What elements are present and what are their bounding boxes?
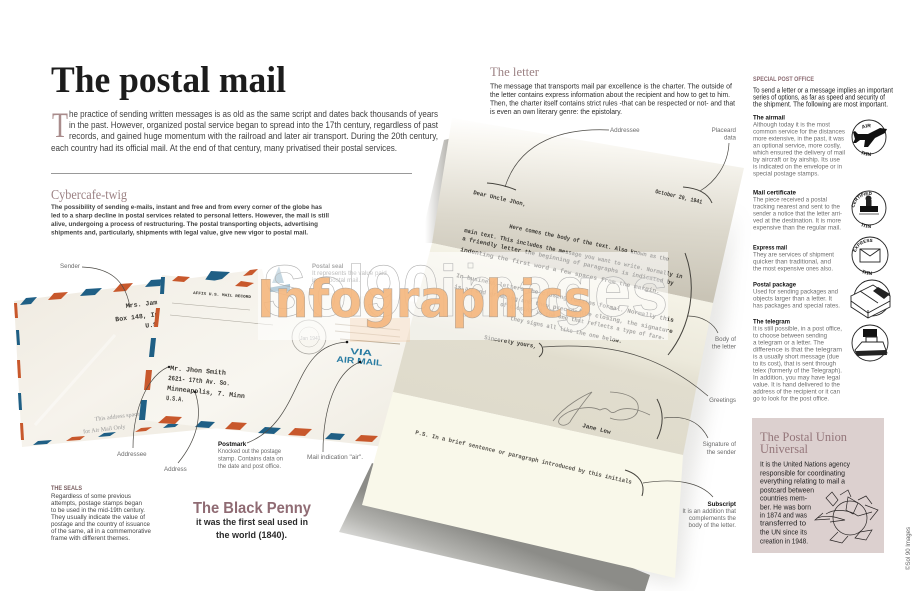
callout: The Black Penny: it was the first seal used in (196, 517, 308, 528)
item: mail certificate: Mail certificate (753, 190, 796, 196)
text block: Cybercafe-twig: led to a sharp decline in postal services related to personal letters. However, the mail is still (51, 212, 329, 220)
callout: Addressee on envelope (117, 366, 170, 458)
callout: Postal seal: Postal seal (312, 264, 344, 270)
intro paragraph: series of options, as far as speed and security of (753, 94, 885, 102)
callout: Greetings (539, 343, 736, 404)
text block: Cybercafe-twig: shipments and, particularly, shipments with legal value, give new vigor to postal mail. (51, 230, 308, 236)
body: the UN since its (760, 530, 807, 536)
item: telegram: is a usually short message (due (753, 354, 839, 360)
item: airmail: by aircraft or by airship. Its use (753, 156, 840, 164)
copyright: ©Sol 90 Images (905, 527, 912, 570)
air mail note: for Air Mail Only (83, 423, 126, 435)
body of letter: Here comes the body of the text. Also known as the (509, 223, 670, 263)
callout: Subscript: Subscript (707, 501, 736, 508)
callout: Placed data: Placeard (712, 127, 737, 134)
soft shadow behind letter (600, 210, 735, 585)
item: telegram: value. It is hand delivered to the (753, 382, 840, 388)
text block: The seals: of the same, all in a commemorative (51, 528, 151, 535)
text block: The letter: is even an own literary genre: the epistolary. (490, 107, 622, 116)
icon: express envelope stamp: TITN (862, 270, 872, 275)
VIA AIR MAIL mark (336, 345, 384, 368)
item: airmail: is indicated on the envelope or in (753, 164, 842, 170)
body: responsible for coordinating (760, 470, 845, 478)
item: airmail: The airmail (753, 114, 785, 122)
body: transferred to (760, 520, 806, 528)
item: mail certificate: expensive than the regular mail. (753, 224, 841, 232)
text block: The seals (51, 486, 151, 542)
panel: special post office: SPECIAL POST OFFICE (753, 76, 815, 83)
item: telegram: In addition, you may have legal (753, 374, 840, 382)
heading: Cybercafe-twig: Cybercafe-twig (51, 188, 127, 203)
text block: The seals: THE SEALS (51, 486, 82, 492)
callout: Sender: Sender (60, 263, 80, 270)
icon: airmail stamp: TITN (862, 150, 871, 156)
text block: Cybercafe-twig: The possibility of sending e-mails, instant and free and from every corner of the globe has (51, 204, 322, 211)
item: postal package (753, 282, 840, 310)
item: mail certificate (753, 190, 842, 232)
intro paragraph: To send a letter or a message implies an important (753, 88, 893, 94)
panel: special post office (752, 76, 893, 402)
item: express mail: quicker than traditional, and (753, 258, 831, 266)
VIA AIR MAIL mark: VIA (350, 346, 373, 358)
body of letter (454, 223, 684, 345)
heading: The letter: The letter (490, 64, 540, 79)
item: airmail: Although today it is the most (753, 122, 830, 128)
body of letter: In business letters the closing remains formal. Normally this (456, 272, 675, 324)
body of letter: of closing is the one that reflects a type of fare- (500, 301, 666, 342)
back address (113, 299, 160, 333)
item: airmail: more extensive, in the past, it was (753, 136, 844, 142)
text block: The letter (490, 82, 736, 116)
callout: Mail indication air: Mail indication "air". (307, 454, 363, 461)
text block: The seals: Regardless of some previous (51, 493, 132, 500)
callout: Postmark: Postmark (218, 441, 247, 448)
notice and lines: AFFIX U.S. MAIL RECORD (193, 292, 252, 300)
callout: Subscript (625, 470, 737, 529)
item: telegram: a telegram or a letter. The (753, 340, 824, 346)
callout: Subscript: complements the (689, 515, 737, 522)
callout: Address: Address (164, 466, 187, 473)
item: airmail: special postage stamps. (753, 170, 819, 178)
callout: Signature of the sender: Signature of (703, 441, 736, 448)
callout: Body of the letter: the letter (712, 344, 736, 350)
callout: Body of the letter (668, 253, 736, 355)
bottom stripes (33, 423, 180, 445)
item: express mail (753, 244, 834, 272)
intro text block (51, 105, 438, 153)
text block: The seals: postage and the country of issuance (51, 521, 150, 528)
text block: The letter: the letter contains express information about the recipient and how to get to him. (490, 90, 730, 99)
text block: The letter: The message that transports mail par excellence is the charter. The outside of (490, 82, 733, 90)
item: telegram: to choose between sending (753, 332, 827, 340)
icon: express envelope stamp (852, 236, 888, 275)
callout: Postmark: Knocked out the postage (218, 448, 282, 455)
item: mail certificate: ved at the destination. It is more (753, 218, 841, 224)
watermark band (258, 252, 668, 340)
closing: Sincerely yours, (484, 334, 537, 350)
body: countries mem- (760, 496, 808, 502)
text block: Cybercafe-twig: alive, undergoing a process of restructuring. The postal transporting objects, advertising (51, 221, 318, 228)
text block: The seals: attempts, postage stamps began (51, 500, 142, 507)
item: telegram: go to look for the post office. (753, 396, 829, 402)
callout: Postmark: stamp. Contains data on (218, 456, 284, 462)
watermark tint patch (350, 318, 410, 342)
intro text block: each country had its official mail. At the end of that century, many privatised their postal services. (51, 143, 397, 153)
item: telegram: difference is that the telegram (753, 346, 842, 354)
address: Minneapolis, 7. Minn (167, 385, 245, 401)
callout: Postal seal (312, 264, 387, 284)
intro text block: records, and gained huge momentum with the railroad and later air transport. During the 20th century, (69, 131, 438, 141)
icon: express envelope stamp: EXPRESS (853, 238, 872, 252)
item: telegram: address of the recipient or it can (753, 388, 840, 396)
callout: Address (164, 391, 198, 473)
watermark: Infographics: Infographics (257, 270, 592, 330)
body of letter: is an end greeting and they precede the closing, the signature (454, 283, 674, 335)
item: airmail: an optional service, more costly, (753, 142, 841, 150)
callout: Postmark (218, 341, 348, 470)
body of letter: they signs all like the one below. (510, 315, 623, 345)
letter: middle fold (393, 243, 713, 455)
item: express mail: Express mail (753, 244, 787, 252)
letter (362, 118, 744, 578)
item: postal package: objects larger than a letter. It (753, 296, 832, 302)
stripes on top (172, 276, 254, 287)
callout: Body of the letter: Body of (715, 336, 736, 343)
stripes on left (139, 277, 165, 420)
air mail note: This address space (95, 412, 140, 423)
stripes on bottom (158, 416, 378, 442)
item: postal package: Used for sending packages and (753, 288, 838, 296)
item: postal package: has packages and special rates. (753, 302, 840, 310)
heading: The Postal Union (760, 430, 848, 444)
intro paragraph: the shipment. The following are most important. (753, 102, 888, 108)
intro text block: he practice of sending written messages is as old as the same script and dates back thousands of years (69, 109, 438, 119)
body: everything relating to mail a (760, 478, 845, 486)
panel: Postal Union Universal (752, 418, 884, 553)
item: airmail: which ensured the delivery of mail (752, 150, 845, 156)
letter edge shadow strip (420, 138, 452, 243)
item: telegram: The telegram (753, 318, 790, 326)
address: U.S.A. (166, 395, 184, 405)
letter: bottom fold (362, 392, 683, 578)
envelope: back (14, 269, 300, 447)
body of letter: indenting the first word a few spaces from the margin. (460, 246, 661, 295)
body: It is the United Nations agency (760, 462, 850, 468)
callout: Greetings: Greetings (709, 397, 736, 404)
callout: Postal seal: in the postal mail. (312, 277, 360, 284)
text block: The seals: They usually indicate the value of (51, 514, 145, 521)
salutation: Dear Uncle Jhon, (473, 189, 527, 208)
icon: airmail stamp: AIR (862, 124, 871, 129)
callout: The Black Penny: The Black Penny (193, 500, 311, 517)
drop cap: T (52, 105, 68, 145)
postmark (292, 320, 400, 354)
icon: telegraph machine (852, 325, 888, 361)
envelope: front (139, 266, 445, 447)
icon: parcel (851, 280, 890, 318)
signature (553, 392, 650, 425)
item: telegram: to its cost), that is sent through (753, 360, 836, 368)
address: 2621- 17th Av. So. (168, 375, 230, 388)
callout: Addressee (487, 127, 640, 190)
callout: Addressee: Addressee (610, 127, 640, 134)
item: express mail: the most expensive ones also. (753, 266, 833, 272)
left stripes (14, 303, 24, 440)
item: mail certificate: tracking nearest and sent to the (753, 204, 840, 210)
callout: Subscript: body of the letter. (689, 522, 736, 529)
callout: Signature of the sender (657, 399, 736, 456)
callout: Postal seal: It represents the value paid (312, 270, 387, 277)
callout: Placed data: data (724, 134, 737, 142)
address: Mr. Jhon Smith (170, 365, 226, 378)
item: telegram: telex (formerly of the Telegraph). (753, 368, 842, 374)
body: ber. He was born (760, 504, 811, 512)
item: postal package: Postal package (753, 282, 796, 288)
callout: Placed data (683, 127, 737, 203)
body: in 1874 and was (760, 512, 807, 520)
text block: The seals: to be used in the mid-19th century. (51, 507, 145, 514)
text block: The seals: frame with different themes. (51, 535, 130, 542)
item: express mail: They are services of shipment (753, 252, 834, 258)
postmark: Jan 1941 (300, 336, 321, 342)
title: The postal mail (51, 60, 286, 101)
VIA AIR MAIL mark: AIR MAIL (336, 354, 383, 368)
callout: Subscript: It is an addition that (682, 508, 736, 515)
letter: top fold (432, 118, 744, 303)
item: mail certificate: sender a notice that the letter arri- (753, 210, 842, 218)
address (166, 365, 245, 405)
letter shadow panel (339, 463, 650, 591)
date: October 20, 1941 (655, 188, 703, 206)
callout: Signature of the sender: the sender (707, 449, 736, 456)
stamp (268, 266, 290, 292)
top stripes (20, 269, 258, 305)
back address: Box 148, In (115, 311, 159, 323)
icon: UPU monument (815, 490, 878, 543)
callout: The Black Penny: the world (1840). (216, 530, 287, 541)
text block: Cybercafe-twig (51, 204, 329, 236)
callout: Mail indication air (307, 361, 363, 461)
body of letter: a friendly letter the beginning of paragraphs is indicated by (462, 235, 675, 287)
back address: U.S (145, 321, 158, 330)
callout: Addressee on envelope: Addressee (117, 451, 147, 458)
sender name: Jane Lew (582, 422, 612, 436)
callout: Postmark: the date and post office. (218, 463, 281, 470)
body: postcard between (760, 488, 814, 494)
icon: certified stamp: CERTIFIED (852, 192, 872, 208)
callout: Sender (60, 263, 130, 307)
intro text block: in the past. However, organized postal service began to spread into the 17th century, regardless of past (69, 120, 438, 130)
item: airmail (752, 114, 845, 178)
watermark: Sol90images outline: Sol90images (262, 252, 668, 332)
icon: airmail stamp (852, 120, 887, 156)
postscript: P.S. In a brief sentence or paragraph introduced by this initials (415, 429, 633, 486)
air mail note (82, 412, 142, 435)
icon: certified stamp: TITN (862, 222, 871, 228)
body of letter: main text. This includes the message you want to write. Normally in (464, 227, 684, 280)
body: creation in 1948. (760, 538, 808, 546)
text block: The letter: Then, the charter itself contains strict rules -that can be respected or not- and that (490, 98, 736, 108)
item: telegram: It is still possible, in a post office, (753, 326, 842, 332)
item: telegram (753, 318, 842, 402)
intro paragraph (753, 88, 893, 108)
icon: certified stamp (852, 190, 886, 228)
back address: Mrs. Jam (125, 299, 158, 310)
panel: Postal Union Universal: Universal (760, 442, 809, 456)
body (760, 462, 850, 546)
item: mail certificate: The piece received a postal (753, 196, 827, 204)
item: airmail: common service for the distances (753, 128, 845, 136)
callout: The Black Penny (193, 500, 311, 541)
